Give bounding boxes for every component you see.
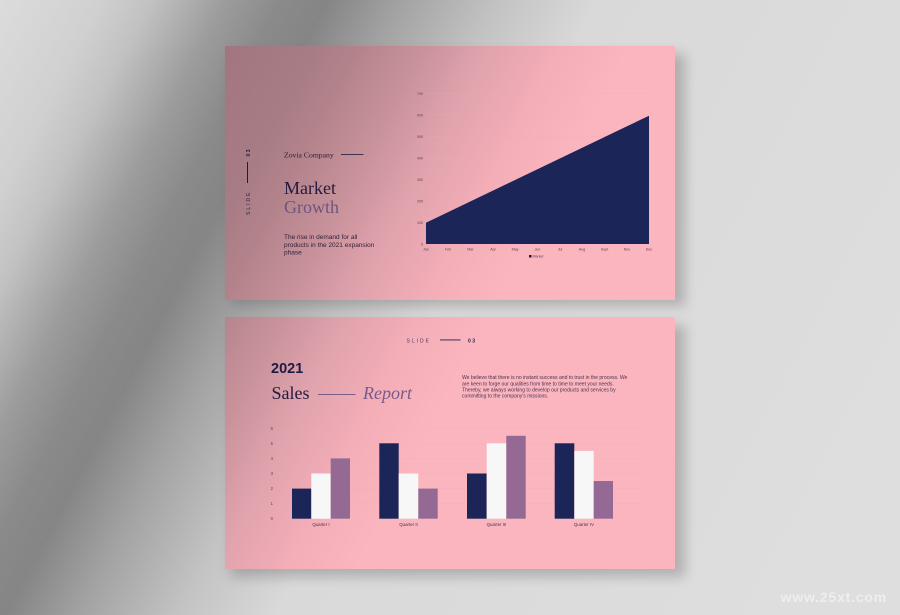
description text: committing to the company's missions. (462, 394, 548, 400)
description text: products in the 2021 expansion (284, 242, 375, 249)
y axis labels: 5 (271, 441, 274, 446)
heading: Market Growth (284, 178, 339, 217)
vertical slide label: SLIDE (246, 191, 252, 215)
x axis labels: Quarter I (312, 522, 330, 527)
y axis labels: 600 (417, 114, 423, 118)
panel: sales report slide (225, 317, 685, 577)
description text: The rise in demand for all (284, 234, 358, 241)
y axis labels: 700 (417, 92, 423, 96)
x axis labels: Dec (646, 248, 652, 252)
y axis labels (417, 92, 423, 246)
y axis labels: 4 (271, 456, 274, 461)
panel: market growth slide (225, 46, 685, 306)
x axis labels: Jul (558, 248, 562, 252)
x axis labels (423, 248, 652, 252)
y axis labels: 0 (271, 516, 274, 521)
x axis labels: Sept (601, 248, 608, 252)
company name with rule (284, 151, 364, 160)
x axis labels: Quarter III (487, 522, 506, 527)
y axis labels: 300 (417, 178, 423, 182)
heading: Sales Report: Report (362, 383, 413, 403)
x axis labels: Apr (490, 248, 497, 252)
slide label (406, 338, 477, 344)
x axis labels: Mar (467, 248, 474, 252)
Quarter IV bars (555, 443, 613, 519)
company name with rule: Zovia Company (284, 151, 334, 160)
legend: Market (532, 255, 543, 259)
Quarter I bars (292, 458, 350, 519)
y axis labels: 400 (417, 156, 423, 160)
x axis labels: May (512, 248, 519, 252)
y axis labels: 200 (417, 200, 423, 204)
vertical slide label: 03 (246, 148, 252, 156)
Quarter II bars (379, 443, 438, 519)
heading: Sales Report (272, 383, 413, 403)
description text: We believe that there is no instant success and to trust in the process. We (462, 375, 628, 381)
description text: Thereby, we always working to develop our products and services by (462, 388, 616, 394)
x axis labels: Nov (624, 248, 630, 252)
slide label: 03 (468, 338, 477, 344)
y axis labels: 3 (271, 471, 274, 476)
description text: are keen to forge our qualities from time to time to meet your needs. (462, 381, 614, 387)
heading: Sales Report: Sales (272, 383, 310, 403)
y axis labels: 1 (271, 501, 274, 506)
y axis labels (271, 426, 274, 521)
y axis labels: 500 (417, 135, 423, 139)
x axis labels: Quarter II (399, 522, 418, 527)
description text: phase (284, 250, 302, 256)
y axis labels: 6 (271, 426, 274, 431)
watermark: www.25xt.com (780, 589, 887, 605)
y axis labels: 2 (271, 486, 274, 491)
heading: Market Growth: Market (284, 178, 336, 198)
x axis labels: Aug (579, 248, 585, 252)
Quarter III bars (467, 436, 526, 519)
heading: 2021: 2021 (271, 361, 303, 377)
heading: Market Growth: Growth (284, 197, 339, 217)
x axis labels: Jan (423, 248, 429, 252)
x axis labels (312, 522, 594, 527)
y axis labels: 0 (421, 242, 423, 246)
vertical slide label (246, 148, 252, 215)
x axis labels: Quarter IV (574, 522, 594, 527)
x axis labels: Jun (535, 248, 540, 252)
x axis labels: Feb (445, 248, 451, 252)
slide label: SLIDE (406, 338, 431, 344)
area chart (417, 92, 652, 259)
y axis labels: 100 (417, 221, 423, 225)
bar chart (271, 426, 640, 527)
